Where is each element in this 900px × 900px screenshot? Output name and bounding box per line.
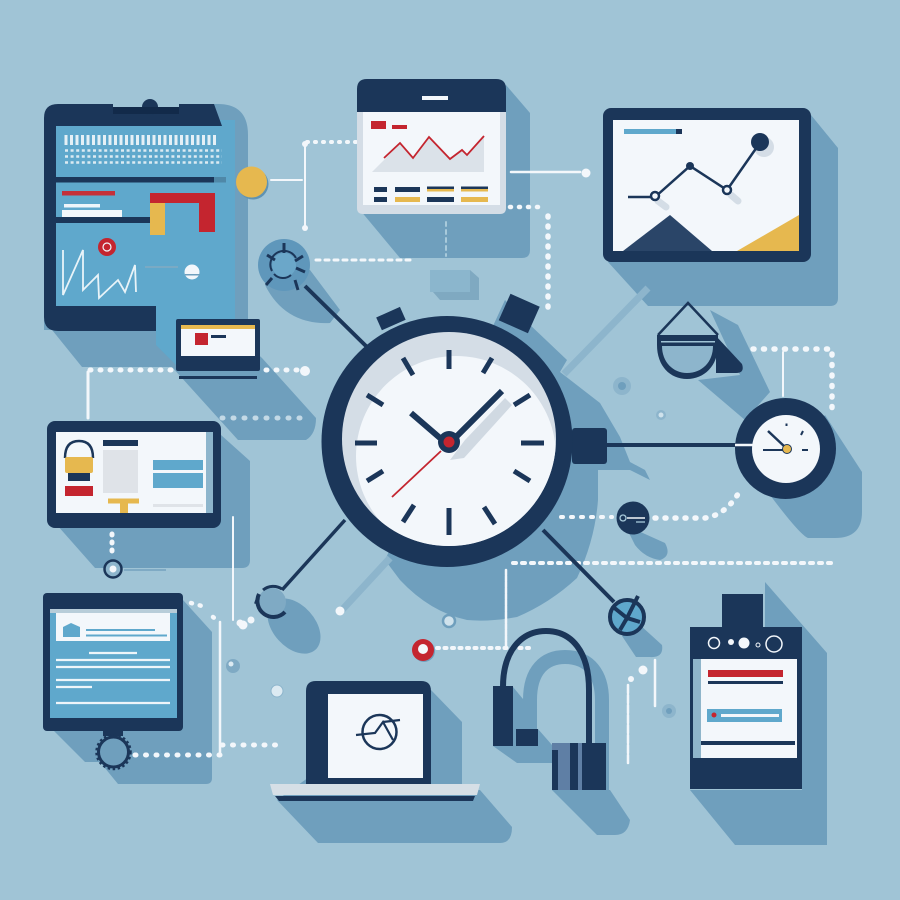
panel: clipboard — [44, 99, 235, 365]
small ring node — [104, 560, 166, 578]
red node — [412, 639, 435, 662]
shadows layer — [44, 85, 862, 845]
dotted connector lines — [88, 142, 832, 765]
icon: gear node — [258, 239, 368, 348]
panel: left tablet — [47, 421, 221, 528]
panel: tablet with line chart — [603, 108, 811, 262]
icon: funnel — [657, 303, 743, 379]
diagonal shadow streaks — [342, 288, 648, 610]
line chart — [63, 250, 136, 298]
panel: browser chart window — [357, 79, 506, 214]
panel: laptop — [270, 681, 480, 801]
red badge — [98, 238, 116, 256]
gold connector dot — [236, 166, 268, 200]
panel: lower left monitor — [43, 593, 183, 731]
clock ticks — [355, 350, 544, 535]
clock connector arm lower-right — [543, 530, 644, 634]
clock hands — [450, 398, 512, 460]
panel: device right — [690, 594, 802, 789]
small grey box icon — [430, 270, 479, 300]
barcode — [66, 135, 214, 145]
bar blocks — [150, 203, 165, 235]
icon: headset and stacks — [493, 631, 606, 790]
small gauge — [607, 398, 836, 499]
key badge — [616, 502, 650, 534]
clock connector arm lower-left — [256, 520, 345, 617]
stopwatch clock — [322, 294, 607, 567]
clock buttons — [376, 307, 406, 330]
clip — [142, 99, 158, 115]
panel: small laptop — [176, 319, 260, 379]
icon: gear — [96, 730, 130, 769]
small dots and rings — [226, 377, 676, 718]
